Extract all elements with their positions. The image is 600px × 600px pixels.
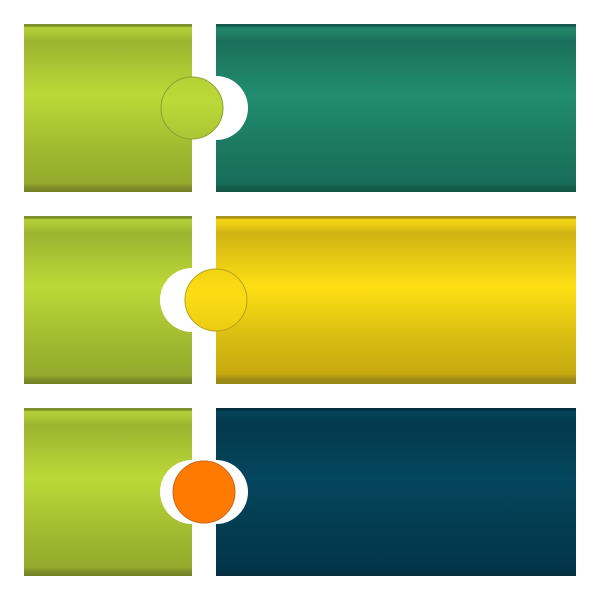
row 2: lime panel with yellow panel <box>24 216 576 384</box>
row 3: lime panel with navy panel <box>24 408 576 576</box>
panel: row 1 left lime <box>24 24 192 192</box>
notch: row 3 right panel cut-out <box>184 460 248 524</box>
panel: row 3 left lime <box>24 408 192 576</box>
panel: row 2 left lime <box>24 216 192 384</box>
notch: row 1 right panel cut-out <box>184 76 248 140</box>
panel: row 1 right green <box>216 24 576 192</box>
panel: row 3 right navy <box>216 408 576 576</box>
connector disc: row 3 orange <box>173 461 235 523</box>
panel: row 2 right yellow <box>216 216 576 384</box>
row 1: lime panel with green panel <box>24 24 576 192</box>
notch: row 3 left panel cut-out <box>160 460 224 524</box>
connector disc: row 2 yellow <box>185 269 247 331</box>
connector disc: row 1 lime <box>161 77 223 139</box>
notch: row 2 left panel cut-out <box>160 268 224 332</box>
